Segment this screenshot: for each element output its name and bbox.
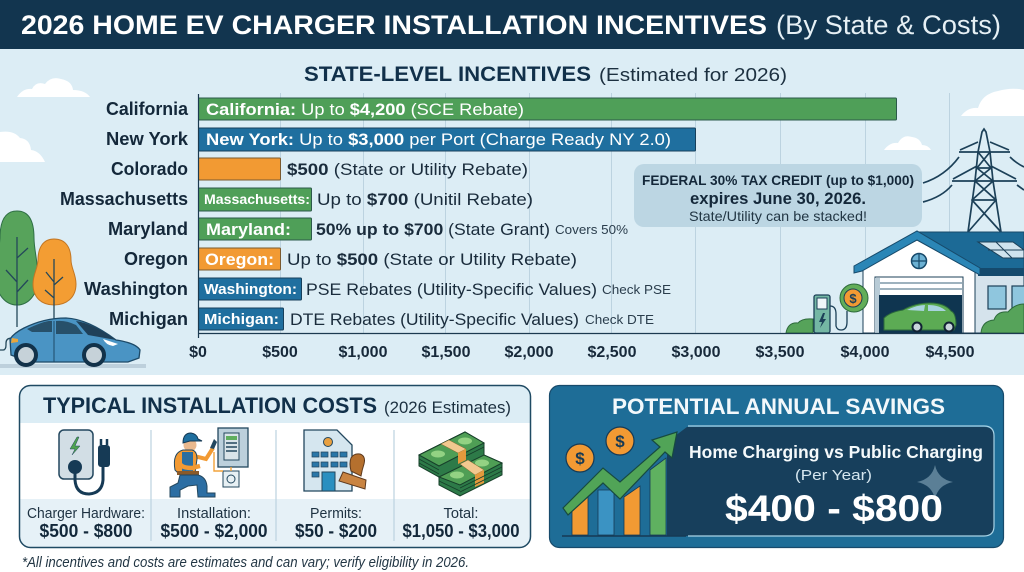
section heading: state-level incentives (304, 63, 787, 86)
bar row: Maryland: Covers 50% (555, 222, 628, 237)
bar row: Oregon: Up to $500 (State or Utility Rebate) (287, 250, 577, 269)
cost item: permits (295, 506, 377, 541)
cost item: installation: $500 - $2,000 (160, 521, 268, 541)
cost item: permits: Permits: (310, 506, 362, 522)
chart axis: $4,000 (841, 344, 890, 361)
bar row: Michigan: DTE Rebates (Utility-Specific Values) (290, 310, 579, 329)
bar row: Massachusetts (60, 188, 533, 211)
cost item: charger hardware: Charger Hardware: (27, 506, 145, 522)
bar row: Michigan: Michigan (109, 309, 188, 329)
bar row: New York (106, 128, 696, 151)
cost item: installation: Installation: (177, 506, 251, 522)
section heading: state-level incentives: STATE-LEVEL INCENTIVES (304, 63, 591, 86)
cost item: charger hardware: $500 - $800 (40, 521, 132, 541)
chart axis: $1,000 (339, 344, 388, 361)
chart axis: $3,000 (672, 344, 721, 361)
bar row: Maryland: Maryland: (206, 220, 291, 239)
savings box: $400 - $800 (725, 488, 943, 529)
icon: rising savings chart: $ (615, 432, 625, 451)
bar row: Oregon: Oregon (124, 249, 188, 269)
savings box (667, 426, 994, 536)
icon: rising savings chart: $ (575, 449, 585, 468)
panel: typical installation costs (20, 386, 530, 548)
chart axis: $3,500 (756, 344, 805, 361)
bar row: Colorado: Colorado (111, 159, 188, 179)
bar row: Michigan: Michigan: (204, 311, 279, 328)
grid lines (280, 93, 950, 333)
bar row: Washington: Washington: (204, 281, 297, 298)
clouds (0, 78, 1024, 162)
bar row: California (106, 98, 896, 120)
icon: wall charger (59, 430, 110, 494)
callout: federal tax credit: expires June 30, 2026. (690, 189, 866, 208)
bar row: Washington: PSE Rebates (Utility-Specific Values) (306, 280, 597, 299)
sparkle (917, 465, 953, 499)
panel: potential annual savings (550, 386, 1004, 548)
bar row: Washington: Check PSE (602, 282, 671, 297)
section heading: state-level incentives: (Estimated for 2026) (599, 65, 787, 85)
icon: stack of cash (419, 432, 502, 496)
chart axis (189, 94, 1024, 361)
chart axis: $2,000 (505, 344, 554, 361)
icon: rising savings chart (562, 427, 686, 536)
footnote: *All incentives and costs are estimates and can vary; verify eligibility in 2026. (22, 555, 469, 571)
icon: green car in garage (884, 303, 956, 332)
bar row: California: California (106, 99, 189, 119)
bar row: Colorado (111, 158, 528, 180)
bar row: Oregon (124, 248, 577, 270)
bar row: Maryland: 50% up to $700 (State Grant) (316, 220, 550, 239)
chart axis: $2,500 (588, 344, 637, 361)
icon: savings coin: $ (849, 291, 857, 306)
bar row: New York: New York: Up to $3,000 per Port (Charge Ready NY 2.0) (206, 130, 671, 149)
heading: typical installation costs: (2026 Estimates) (384, 398, 511, 417)
chart axis: $0 (189, 344, 207, 361)
cost item: total (402, 506, 520, 541)
bar row: Michigan (109, 308, 654, 330)
title: (By State & Costs) (776, 10, 1001, 40)
pylon (923, 129, 1024, 232)
icon: house with garage (786, 231, 1024, 333)
chart axis: $500 (262, 344, 298, 361)
icon: trees (0, 211, 76, 327)
bar row: Washington: Washington (84, 279, 188, 299)
header band (0, 0, 1024, 49)
panel: state-level incentives background (0, 49, 1024, 375)
bar row: Michigan: Check DTE (585, 312, 654, 327)
callout: federal tax credit: State/Utility can be stacked! (689, 208, 867, 224)
bar row: Massachusetts: Massachusetts (60, 189, 188, 209)
savings box: (Per Year) (795, 467, 872, 484)
bar row: Maryland: Maryland (108, 219, 188, 239)
bar row: Massachusetts: Massachusetts: (204, 191, 310, 207)
chart axis: $4,500 (926, 344, 975, 361)
heading: potential annual savings: POTENTIAL ANNUAL SAVINGS (612, 394, 945, 419)
cost item: total: Total: (444, 506, 478, 522)
heading: typical installation costs: TYPICAL INSTALLATION COSTS (43, 393, 377, 418)
bar row: New York: New York (106, 129, 189, 149)
bar row: California: California: Up to $4,200 (SCE Rebate) (206, 100, 524, 119)
icon: permit document and stamp (304, 430, 366, 491)
callout: federal tax credit: FEDERAL 30% TAX CREDIT (up to $1,000) (642, 172, 914, 188)
bar row: Maryland (108, 218, 628, 240)
bar row: Oregon: Oregon: (205, 250, 274, 269)
icon: electrician (170, 428, 248, 497)
chart: state incentive bars (60, 94, 1024, 361)
chart axis: $1,500 (422, 344, 471, 361)
icon: charging station (814, 295, 847, 333)
icon: blue electric car (0, 318, 146, 368)
title: 2026 HOME EV CHARGER INSTALLATION INCENTIVES (21, 10, 767, 40)
cost item: total: $1,050 - $3,000 (402, 521, 520, 541)
bar row: Massachusetts: Up to $700 (Unitil Rebate) (317, 190, 533, 209)
bar row: Colorado: $500 (State or Utility Rebate) (287, 160, 528, 179)
cost item: permits: $50 - $200 (295, 521, 377, 541)
bar row: Washington (84, 278, 671, 300)
icon: savings coin (840, 284, 868, 312)
cost item: charger hardware (27, 506, 145, 541)
savings box: Home Charging vs Public Charging (689, 442, 983, 462)
cost item: installation (160, 506, 268, 541)
callout: federal tax credit (634, 164, 922, 227)
